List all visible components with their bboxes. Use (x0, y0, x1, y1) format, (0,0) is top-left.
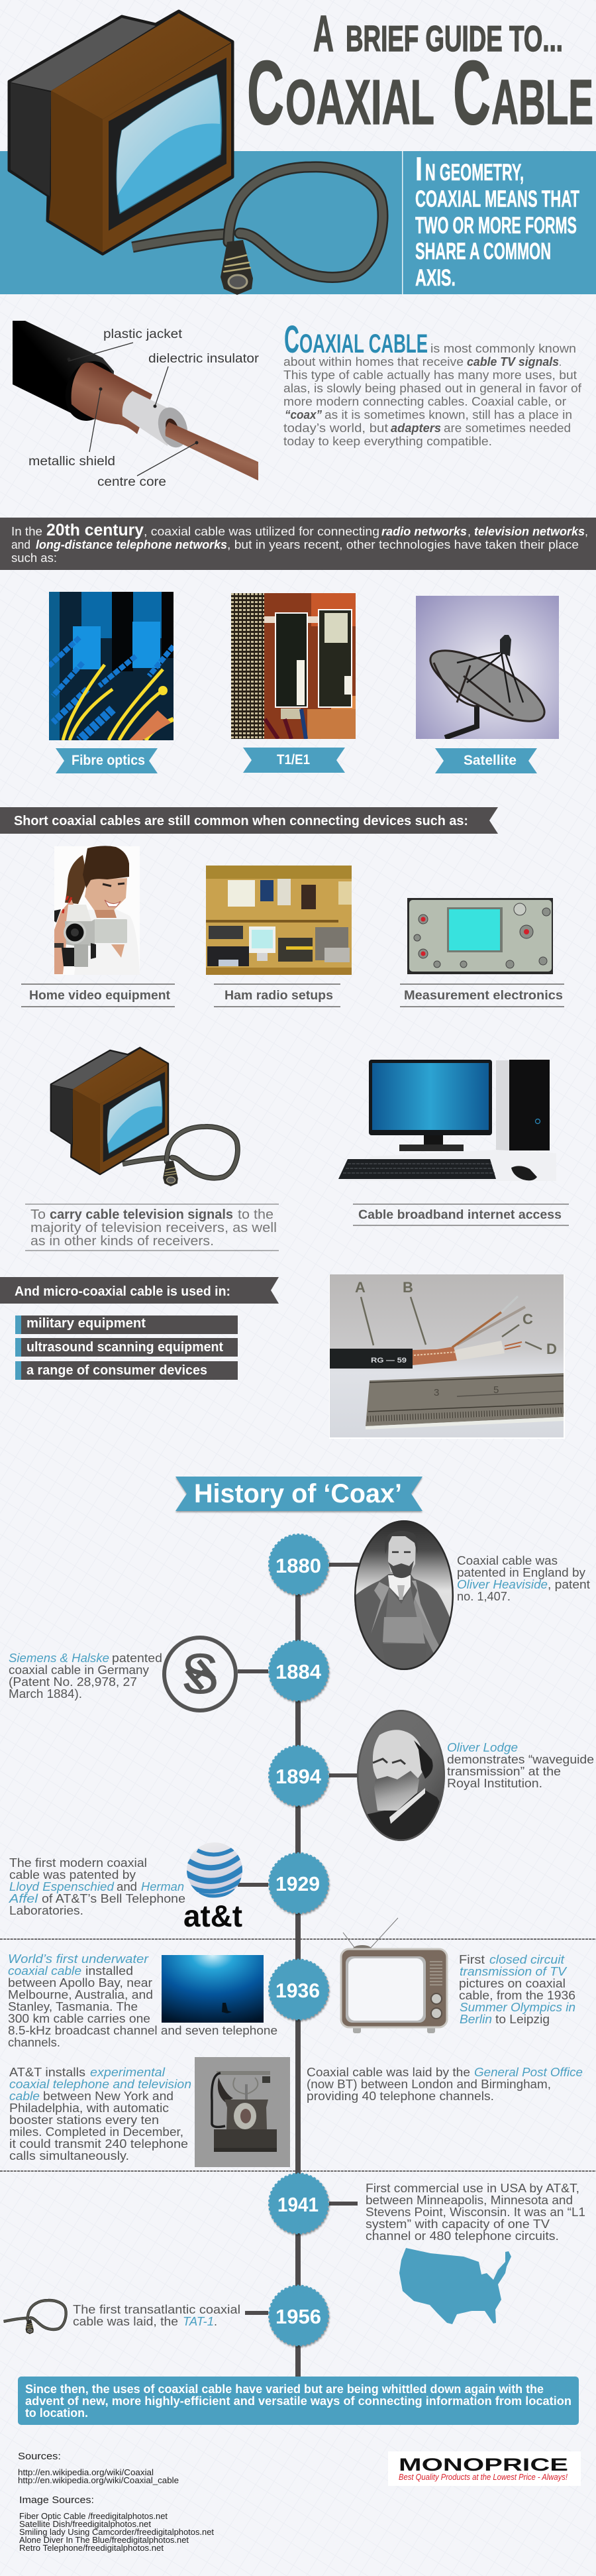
year badge: 1894: 1894 (275, 1765, 322, 1788)
text: closed circuit TV: pictures on coaxial (459, 1977, 566, 1990)
timeline event: 1936 badge (269, 1960, 328, 2019)
logo: Siemens & Halske: S (181, 1642, 219, 1706)
text: sources: http://en.wikipedia.org/wiki/Coaxial_cable (18, 2475, 179, 2485)
panel: 20th century band: In the (11, 525, 42, 538)
intro text block: . (559, 355, 562, 368)
text: 1880 event: , patent (548, 1578, 590, 1591)
photo: fibre optics (49, 592, 174, 740)
text: 1884 event: (Patent No. 28,978, 27 (9, 1675, 137, 1689)
logo: Siemens & Halske: H (179, 1652, 223, 1698)
list: micro-coaxial uses: military equipment (26, 1316, 146, 1331)
intro text block: today to keep everything compatible. (283, 435, 492, 448)
label: centre core: centre core (97, 475, 166, 489)
text: 1929 event: Affel (9, 1892, 38, 1905)
text: 1956 event: . (214, 2315, 217, 2328)
cable cross-section diagram (13, 321, 260, 489)
text: 1929 event: Lloyd Espenschied (9, 1880, 115, 1893)
ribbon heading: short coaxial cables: Short coaxial cables are still common when connecting devices such as: (14, 814, 468, 828)
intro text block: more modern connecting cables. Coaxial cable, or (283, 395, 566, 408)
text: 1884 event: patented (112, 1652, 162, 1665)
dashed dividers (0, 1939, 596, 2171)
text: 1880 event: Oliver Heaviside (457, 1578, 548, 1591)
timeline event: 1929 (238, 1853, 328, 1913)
text: 1894 event: demonstrates “waveguide (447, 1753, 594, 1766)
caption: carry cable television signals: to the (238, 1207, 273, 1222)
photo: stripped coaxial cable with ruler: B (403, 1279, 413, 1296)
text: 1929 event: of AT&T’s Bell Telephone (42, 1892, 185, 1905)
text: 1884 event: coaxial cable in Germany (9, 1663, 149, 1677)
text: 1880 event: no. 1,407. (457, 1590, 511, 1603)
text: AT&T experimental cable: experimental (90, 2066, 166, 2079)
text: underwater cable: Stanley, Tasmania. The (8, 2000, 138, 2013)
text: closed circuit TV: Berlin (460, 2013, 492, 2026)
intro text block: adapters (391, 421, 441, 435)
title: C (453, 42, 491, 144)
text: underwater cable (8, 1952, 277, 2049)
text: closed circuit TV: Summer Olympics in (460, 2001, 575, 2014)
text: 1956 event: TAT-1 (183, 2315, 214, 2328)
text: General Post Office: Coaxial cable was laid by the (307, 2066, 470, 2079)
panel: 20th century band: , (585, 525, 588, 538)
photo: stripped coaxial cable with ruler: RG — 59 (371, 1357, 407, 1365)
intro text block: today’s world, but (283, 421, 388, 435)
text: General Post Office: (now BT) between London and Birmingham, (307, 2078, 551, 2091)
text: 1929 event: and (117, 1880, 137, 1893)
logo: Monoprice: MONOPRICE (399, 2455, 568, 2475)
illustration: retro television (341, 1918, 447, 2033)
intro text block: OAXIAL CABLE (299, 329, 428, 359)
text: AT&T experimental cable: between New York and (43, 2090, 174, 2103)
title (247, 5, 593, 144)
text: image sources: Satellite Dish/freedigitalphotos.net (19, 2519, 151, 2529)
panel: closing statement (18, 2377, 579, 2425)
title: C (247, 42, 284, 144)
text: AT&T experimental cable: cable (9, 2090, 40, 2103)
year badge: 1941: 1941 (277, 2193, 319, 2216)
photo: stripped coaxial cable with ruler: 5 (493, 1384, 499, 1396)
text: 1884 event: March 1884). (9, 1687, 82, 1701)
photo: satellite dish (416, 596, 559, 739)
header band (0, 151, 596, 294)
intro text block: cable TV signals (467, 355, 559, 368)
ribbon heading: short coaxial cables (0, 807, 498, 834)
intro text block (283, 318, 582, 448)
logo: AT&T globe: at&t (183, 1899, 242, 1933)
text: 1941 event (366, 2182, 585, 2243)
photo: stripped coaxial cable with ruler: A (355, 1279, 366, 1296)
map: United States (399, 2248, 511, 2324)
text: underwater cable: between Apollo Bay, near (8, 1976, 152, 1989)
photo: T1/E1 equipment (231, 593, 356, 739)
list: micro-coaxial uses (15, 1316, 238, 1380)
caption: Measurement electronics (400, 984, 564, 1007)
text: closed circuit TV: to Leipzig (495, 2013, 550, 2026)
text: sources: http://en.wikipedia.org/wiki/Coaxial (18, 2467, 154, 2477)
text: 1894 event (447, 1741, 594, 1790)
text: closed circuit TV: closed circuit (489, 1953, 565, 1966)
portrait: Oliver Lodge (357, 1710, 447, 1846)
text: AT&T experimental cable: Philadelphia, with automatic (9, 2101, 169, 2115)
text: 1941 event: First commercial use in USA by AT&T, (366, 2182, 579, 2195)
ribbon: Fibre optics: Fibre optics (72, 753, 145, 768)
text: closed circuit TV: First (459, 1953, 485, 1966)
text: 1880 event: Coaxial cable was (457, 1554, 558, 1567)
text: underwater cable: 300 km cable carries one (8, 2012, 150, 2025)
caption: cable broadband internet access (353, 1204, 569, 1225)
intro text block: are sometimes needed (444, 421, 571, 435)
text: General Post Office: providing 40 telephone channels. (307, 2090, 494, 2103)
list: micro-coaxial uses: ultrasound scanning equipment (26, 1340, 223, 1355)
year badge: 1884: 1884 (275, 1660, 322, 1683)
ribbon heading: history of coax: History of ‘Coax’ (194, 1479, 402, 1508)
panel: 20th century band: , but in years recent, other technologies have taken their place (227, 538, 579, 551)
panel: 20th century band (0, 518, 596, 570)
text: 1956 event: cable was laid, the (73, 2315, 178, 2328)
panel: 20th century band: , (468, 525, 471, 538)
year badge: 1929: 1929 (275, 1872, 320, 1895)
text: image sources: Smiling lady Using Camcorder/freedigitalphotos.net (19, 2527, 214, 2537)
text: image sources: Image Sources: (19, 2494, 94, 2506)
photo: diver in deep blue (162, 1955, 264, 2023)
text: AT&T experimental cable (9, 2066, 191, 2162)
caption: Ham radio setups: Ham radio setups (224, 989, 333, 1003)
text: image sources: Retro Telephone/freedigitalphotos.net (19, 2543, 164, 2553)
text: AT&T experimental cable: booster stations every ten (9, 2113, 159, 2127)
timeline event: 1956 (245, 2286, 328, 2345)
text: 1894 event: Royal Institution. (447, 1777, 542, 1790)
ribbon: Satellite: Satellite (464, 753, 517, 768)
list: micro-coaxial uses: a range of consumer devices (26, 1363, 207, 1378)
caption: carry cable television signals: majority of television receivers, as well (30, 1221, 277, 1235)
panel: 20th century band: radio networks (381, 525, 467, 538)
photo: woman with video camera (54, 846, 140, 975)
panel: 20th century band: television networks (474, 525, 585, 538)
text: sources (18, 2451, 179, 2485)
year badge: 1956: 1956 (275, 2305, 321, 2328)
text: 1894 event: Oliver Lodge (447, 1741, 518, 1754)
text: 1929 event: Herman (141, 1880, 184, 1893)
timeline event: 1880 (269, 1535, 359, 1595)
ribbon heading: micro-coaxial: And micro-coaxial cable is used in: (15, 1284, 230, 1299)
timeline event: 1941 (269, 2174, 358, 2233)
text: 1884 event: Siemens & Halske (9, 1652, 109, 1665)
title: OAXIAL (285, 67, 434, 138)
title: A (313, 5, 334, 62)
text: underwater cable: Melbourne, Australia, and (8, 1988, 153, 2001)
timeline event: 1884 (238, 1641, 328, 1701)
text: 1894 event: transmission” at the (447, 1765, 561, 1778)
text: AT&T experimental cable: coaxial telephone and television (9, 2078, 191, 2091)
caption: cable broadband internet access: Cable broadband internet access (358, 1208, 562, 1222)
text: underwater cable: installed (85, 1964, 133, 1978)
text: image sources (19, 2494, 214, 2553)
text: image sources: Fiber Optic Cable /freedigitalphotos.net (19, 2511, 168, 2521)
text: 1929 event: cable was patented by (9, 1868, 136, 1881)
caption: carry cable television signals: To (30, 1207, 46, 1222)
text: AT&T experimental cable: calls simultaneously. (9, 2149, 129, 2162)
intro text block: C (284, 318, 299, 361)
intro text block: is most commonly known (430, 342, 576, 355)
text: 1880 event: patented in England by (457, 1566, 585, 1579)
text: sources: Sources: (18, 2451, 61, 2462)
panel: closing statement: to location. (25, 2406, 88, 2420)
timeline spine (295, 1564, 301, 2377)
text: 1929 event (9, 1856, 185, 1917)
ribbon: Fibre optics (56, 748, 158, 773)
definition text: I (415, 150, 422, 188)
text: closed circuit TV: cable, from the 1936 (459, 1989, 575, 2002)
caption: carry cable television signals: carry cable television signals (50, 1207, 233, 1222)
ribbon: T1/E1: T1/E1 (277, 752, 310, 767)
panel: 20th century band: and (11, 538, 30, 551)
text: General Post Office (307, 2066, 583, 2103)
photo: desktop computer (338, 1060, 556, 1181)
label: metallic shield: metallic shield (28, 455, 115, 469)
intro text block: as it is sometimes known, still has a place in (324, 408, 572, 421)
photo: measurement electronics oscilloscope (407, 898, 553, 974)
intro text block: “coax” (285, 408, 322, 421)
panel: 20th century band: 20th century (46, 521, 144, 539)
text: AT&T experimental cable: it could transmit 240 telephone (9, 2137, 188, 2151)
panel: closing statement: advent of new, more highly-efficient and versatile ways of connecting information from location (25, 2394, 571, 2408)
intro text block: This type of cable actually has many more uses, but (283, 368, 577, 382)
ribbon heading: micro-coaxial (0, 1277, 279, 1304)
panel: 20th century band: , coaxial cable was utilized for connecting (144, 525, 379, 538)
caption: Measurement electronics: Measurement electronics (404, 989, 563, 1003)
intro text block: about within homes that receive (283, 355, 464, 368)
panel: closing statement: Since then, the uses of coaxial cable have varied but are being whittled down again with the (25, 2382, 544, 2396)
definition text: AXIS. (415, 265, 456, 291)
text: 1884 event (9, 1652, 162, 1701)
text: 1929 event: The first modern coaxial (9, 1856, 147, 1870)
panel: 20th century band: long-distance telephone networks (36, 538, 227, 551)
logo: AT&T globe (184, 1842, 242, 1927)
text: 1941 event: system” with capacity of one TV (366, 2217, 550, 2231)
photo: vintage telephone (195, 2057, 290, 2167)
icon: small television with cable (51, 1048, 238, 1186)
text: image sources: Alone Diver In The Blue/freedigitalphotos.net (19, 2535, 189, 2545)
label: dielectric insulator: dielectric insulator (148, 352, 260, 366)
text: closed circuit TV (459, 1953, 575, 2026)
text: underwater cable: World’s first underwater (8, 1952, 149, 1966)
text: underwater cable: coaxial cable (8, 1964, 81, 1978)
caption: carry cable television signals (25, 1204, 279, 1251)
portrait: Oliver Heaviside (351, 1520, 457, 1673)
logo: Siemens & Halske (164, 1638, 236, 1710)
label: plastic jacket: plastic jacket (103, 327, 183, 341)
text: 1956 event (73, 2303, 240, 2328)
year badge: 1880: 1880 (275, 1554, 321, 1577)
intro text block: alas, is slowly being phased out in general in favor of (283, 382, 582, 395)
photo: stripped coaxial cable with ruler: C (522, 1311, 533, 1327)
photo: stripped coaxial cable with ruler: 3 (434, 1387, 439, 1398)
photo: stripped coaxial cable with ruler: D (546, 1341, 557, 1357)
definition text: N GEOMETRY, (425, 160, 524, 186)
text: AT&T experimental cable: miles. Completed in December, (9, 2125, 183, 2139)
photo: ham radio setup (206, 866, 352, 975)
ribbon: T1/E1 (243, 748, 345, 773)
caption: Ham radio setups (214, 984, 340, 1007)
text: 1941 event: Stevens Point, Wisconsin. It was an “L1 (366, 2206, 585, 2219)
panel: 20th century band: such as: (11, 551, 57, 565)
definition text (415, 150, 579, 291)
logo: Monoprice: Best Quality Products at the Lowest Price - Always! (399, 2472, 568, 2482)
ribbon: Satellite (435, 748, 537, 773)
timeline event: 1894 (269, 1746, 358, 1805)
text: underwater cable: channels. (8, 2036, 60, 2049)
caption: Home video equipment (21, 984, 175, 1007)
caption: Home video equipment: Home video equipment (29, 989, 171, 1003)
icon: television with coaxial cable (9, 11, 383, 295)
caption: carry cable television signals: as in other kinds of receivers. (30, 1234, 214, 1249)
text: closed circuit TV: transmission of TV (460, 1965, 568, 1978)
text: 1929 event: Laboratories. (9, 1904, 83, 1917)
icon: small cable (4, 2300, 66, 2334)
photo: stripped coaxial cable with ruler (329, 1274, 565, 1439)
text: 1941 event: channel or 480 telephone circuits. (366, 2229, 559, 2243)
timeline event: 1936 badge: 1936 (275, 1979, 320, 2002)
text: underwater cable: 8.5-kHz broadcast channel and seven telephone (8, 2024, 277, 2037)
text: General Post Office: General Post Office (474, 2066, 583, 2079)
logo: Monoprice (388, 2451, 581, 2486)
text: 1941 event: between Minneapolis, Minnesota and (366, 2194, 573, 2207)
text: 1880 event (457, 1554, 590, 1603)
text: 1956 event: The first transatlantic coaxial (73, 2303, 240, 2316)
text: AT&T experimental cable: AT&T installs (9, 2066, 85, 2079)
